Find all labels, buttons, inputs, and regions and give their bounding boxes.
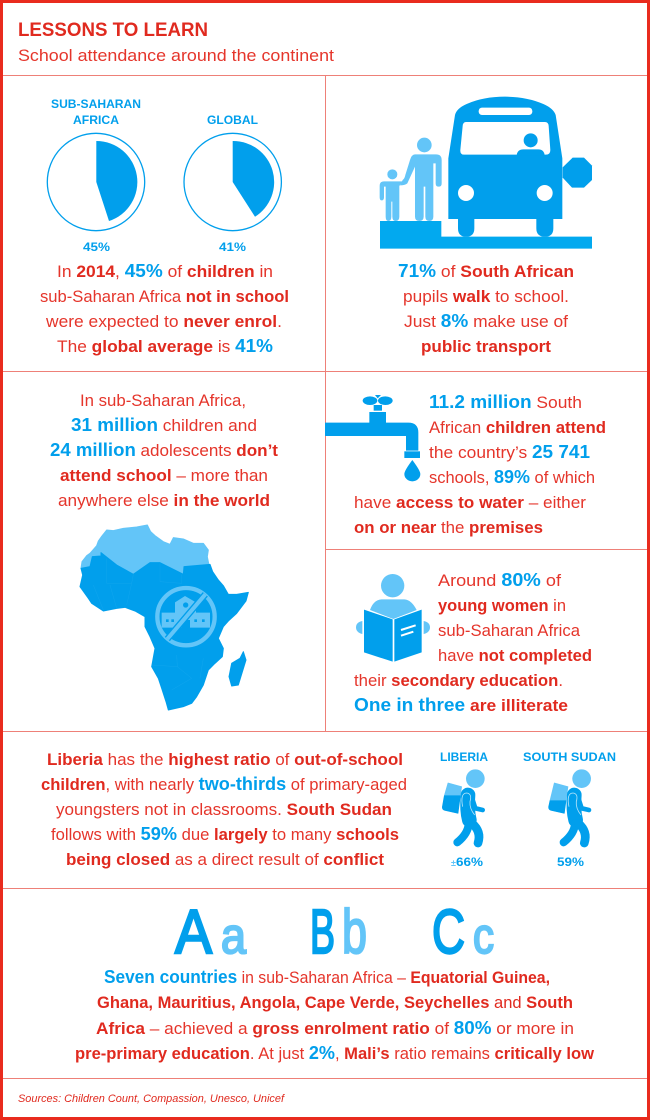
text: millions out of school <box>50 392 279 510</box>
title <box>18 20 334 65</box>
icon: alphabet letters: A <box>175 898 213 967</box>
panel: water <box>325 392 606 537</box>
icon: person reading <box>356 574 430 662</box>
panel: young women <box>354 570 592 715</box>
text: enrolment ratio: Seven countries in sub-Saharan Africa – Equatorial Guinea, <box>104 967 550 987</box>
text: water access <box>354 392 606 537</box>
text: water access: on or near the premises <box>354 519 543 537</box>
panel: never enrol <box>40 97 289 356</box>
panel: transport <box>380 97 592 356</box>
chart: South Sudan 59%: 59% <box>557 855 584 869</box>
text: enrolment ratio: Africa – achieved a gross enrolment ratio of 80% or more in <box>96 1018 574 1038</box>
pie chart: global 41%: 41% <box>219 240 246 254</box>
text: enrolment: The global average is 41% <box>57 336 273 356</box>
chart: Liberia 66%: LIBERIA <box>440 750 488 764</box>
text: millions out of school: attend school – more than <box>60 467 268 485</box>
text: Liberia and South Sudan: youngsters not in classrooms. South Sudan <box>56 801 392 819</box>
text: Liberia and South Sudan: Liberia has the highest ratio of out-of-school <box>47 751 403 769</box>
text: secondary education: young women in <box>438 597 566 615</box>
icon: no school sign <box>157 588 215 645</box>
pie chart: sub-Saharan Africa 45% <box>47 97 145 254</box>
text: walk to school <box>398 261 574 356</box>
text: secondary education: have not completed <box>438 647 592 665</box>
text: water access: African children attend <box>429 419 606 437</box>
text: secondary education: sub-Saharan Africa <box>438 622 581 640</box>
panel: out of school <box>50 392 279 710</box>
text: Liberia and South Sudan: children, with nearly two-thirds of primary-aged <box>41 774 407 794</box>
pie chart: global 41% <box>184 113 281 254</box>
text: Liberia and South Sudan <box>41 751 407 869</box>
text: enrolment ratio: pre-primary education. At just 2%, Mali’s ratio remains critically low <box>75 1043 594 1063</box>
chart: South Sudan 59% <box>523 750 616 869</box>
text: secondary education <box>354 570 592 715</box>
panel: highest ratios <box>41 750 616 869</box>
text: Liberia and South Sudan: being closed as a direct result of conflict <box>66 851 385 869</box>
panel: pre-primary <box>75 898 594 1063</box>
text: millions out of school: 24 million adolescents don’t <box>50 440 279 460</box>
text: enrolment ratio <box>75 967 594 1063</box>
text: secondary education: Around 80% of <box>438 570 561 590</box>
sources: Sources: Children Count, Compassion, Unesco, Unicef <box>18 1093 285 1105</box>
chart: Liberia 66% <box>440 750 488 869</box>
map: Africa <box>80 525 248 710</box>
pie chart: sub-Saharan Africa 45%: 45% <box>83 240 110 254</box>
pie chart: sub-Saharan Africa 45%: SUB-SAHARAN <box>51 97 141 111</box>
text: enrolment ratio: Ghana, Mauritius, Angola, Cape Verde, Seychelles and South <box>97 994 573 1012</box>
text: water access: schools, 89% of which <box>429 467 595 487</box>
pie chart: global 41%: GLOBAL <box>207 113 258 127</box>
icon: tap <box>325 395 420 481</box>
text: enrolment: sub-Saharan Africa not in school <box>40 288 289 306</box>
text: Liberia and South Sudan: follows with 59% due largely to many schools <box>51 824 399 844</box>
text: walk to school: pupils walk to school. <box>403 288 569 306</box>
icon: alphabet letters: a <box>221 908 246 964</box>
icon: bus stop with adult and child <box>380 97 592 249</box>
icon: alphabet letters: C <box>432 898 465 967</box>
subheading: School attendance around the continent <box>18 46 334 65</box>
icon: alphabet letters: B <box>310 898 335 967</box>
chart: Liberia 66%: ± <box>451 858 456 868</box>
chart: South Sudan 59%: SOUTH SUDAN <box>523 750 616 764</box>
text: water access: 11.2 million South <box>429 392 582 412</box>
text: walk to school: public transport <box>421 338 552 356</box>
text: walk to school: Just 8% make use of <box>404 311 568 331</box>
icon: alphabet letters: c <box>473 908 494 964</box>
text: water access: the country’s 25 741 <box>429 442 590 462</box>
pie chart: sub-Saharan Africa 45%: AFRICA <box>73 113 119 127</box>
text: millions out of school: In sub-Saharan Africa, <box>80 392 246 410</box>
text: enrolment <box>40 261 289 356</box>
text: enrolment: were expected to never enrol . <box>45 313 282 331</box>
chart: Liberia 66%: 66% <box>456 855 483 869</box>
icon: alphabet letters: b <box>342 898 367 967</box>
heading: LESSONS TO LEARN <box>18 20 208 41</box>
text: walk to school: 71% of South African <box>398 261 574 281</box>
text: secondary education: their secondary education. <box>354 672 563 690</box>
text: millions out of school: anywhere else in the world <box>58 492 270 510</box>
icon: alphabet letters <box>175 898 494 967</box>
text: enrolment: In 2014, 45% of children in <box>57 261 273 281</box>
text: secondary education: One in three are illiterate <box>354 695 568 715</box>
text: millions out of school: 31 million children and <box>71 415 257 435</box>
text: water access: have access to water – either <box>354 494 587 512</box>
